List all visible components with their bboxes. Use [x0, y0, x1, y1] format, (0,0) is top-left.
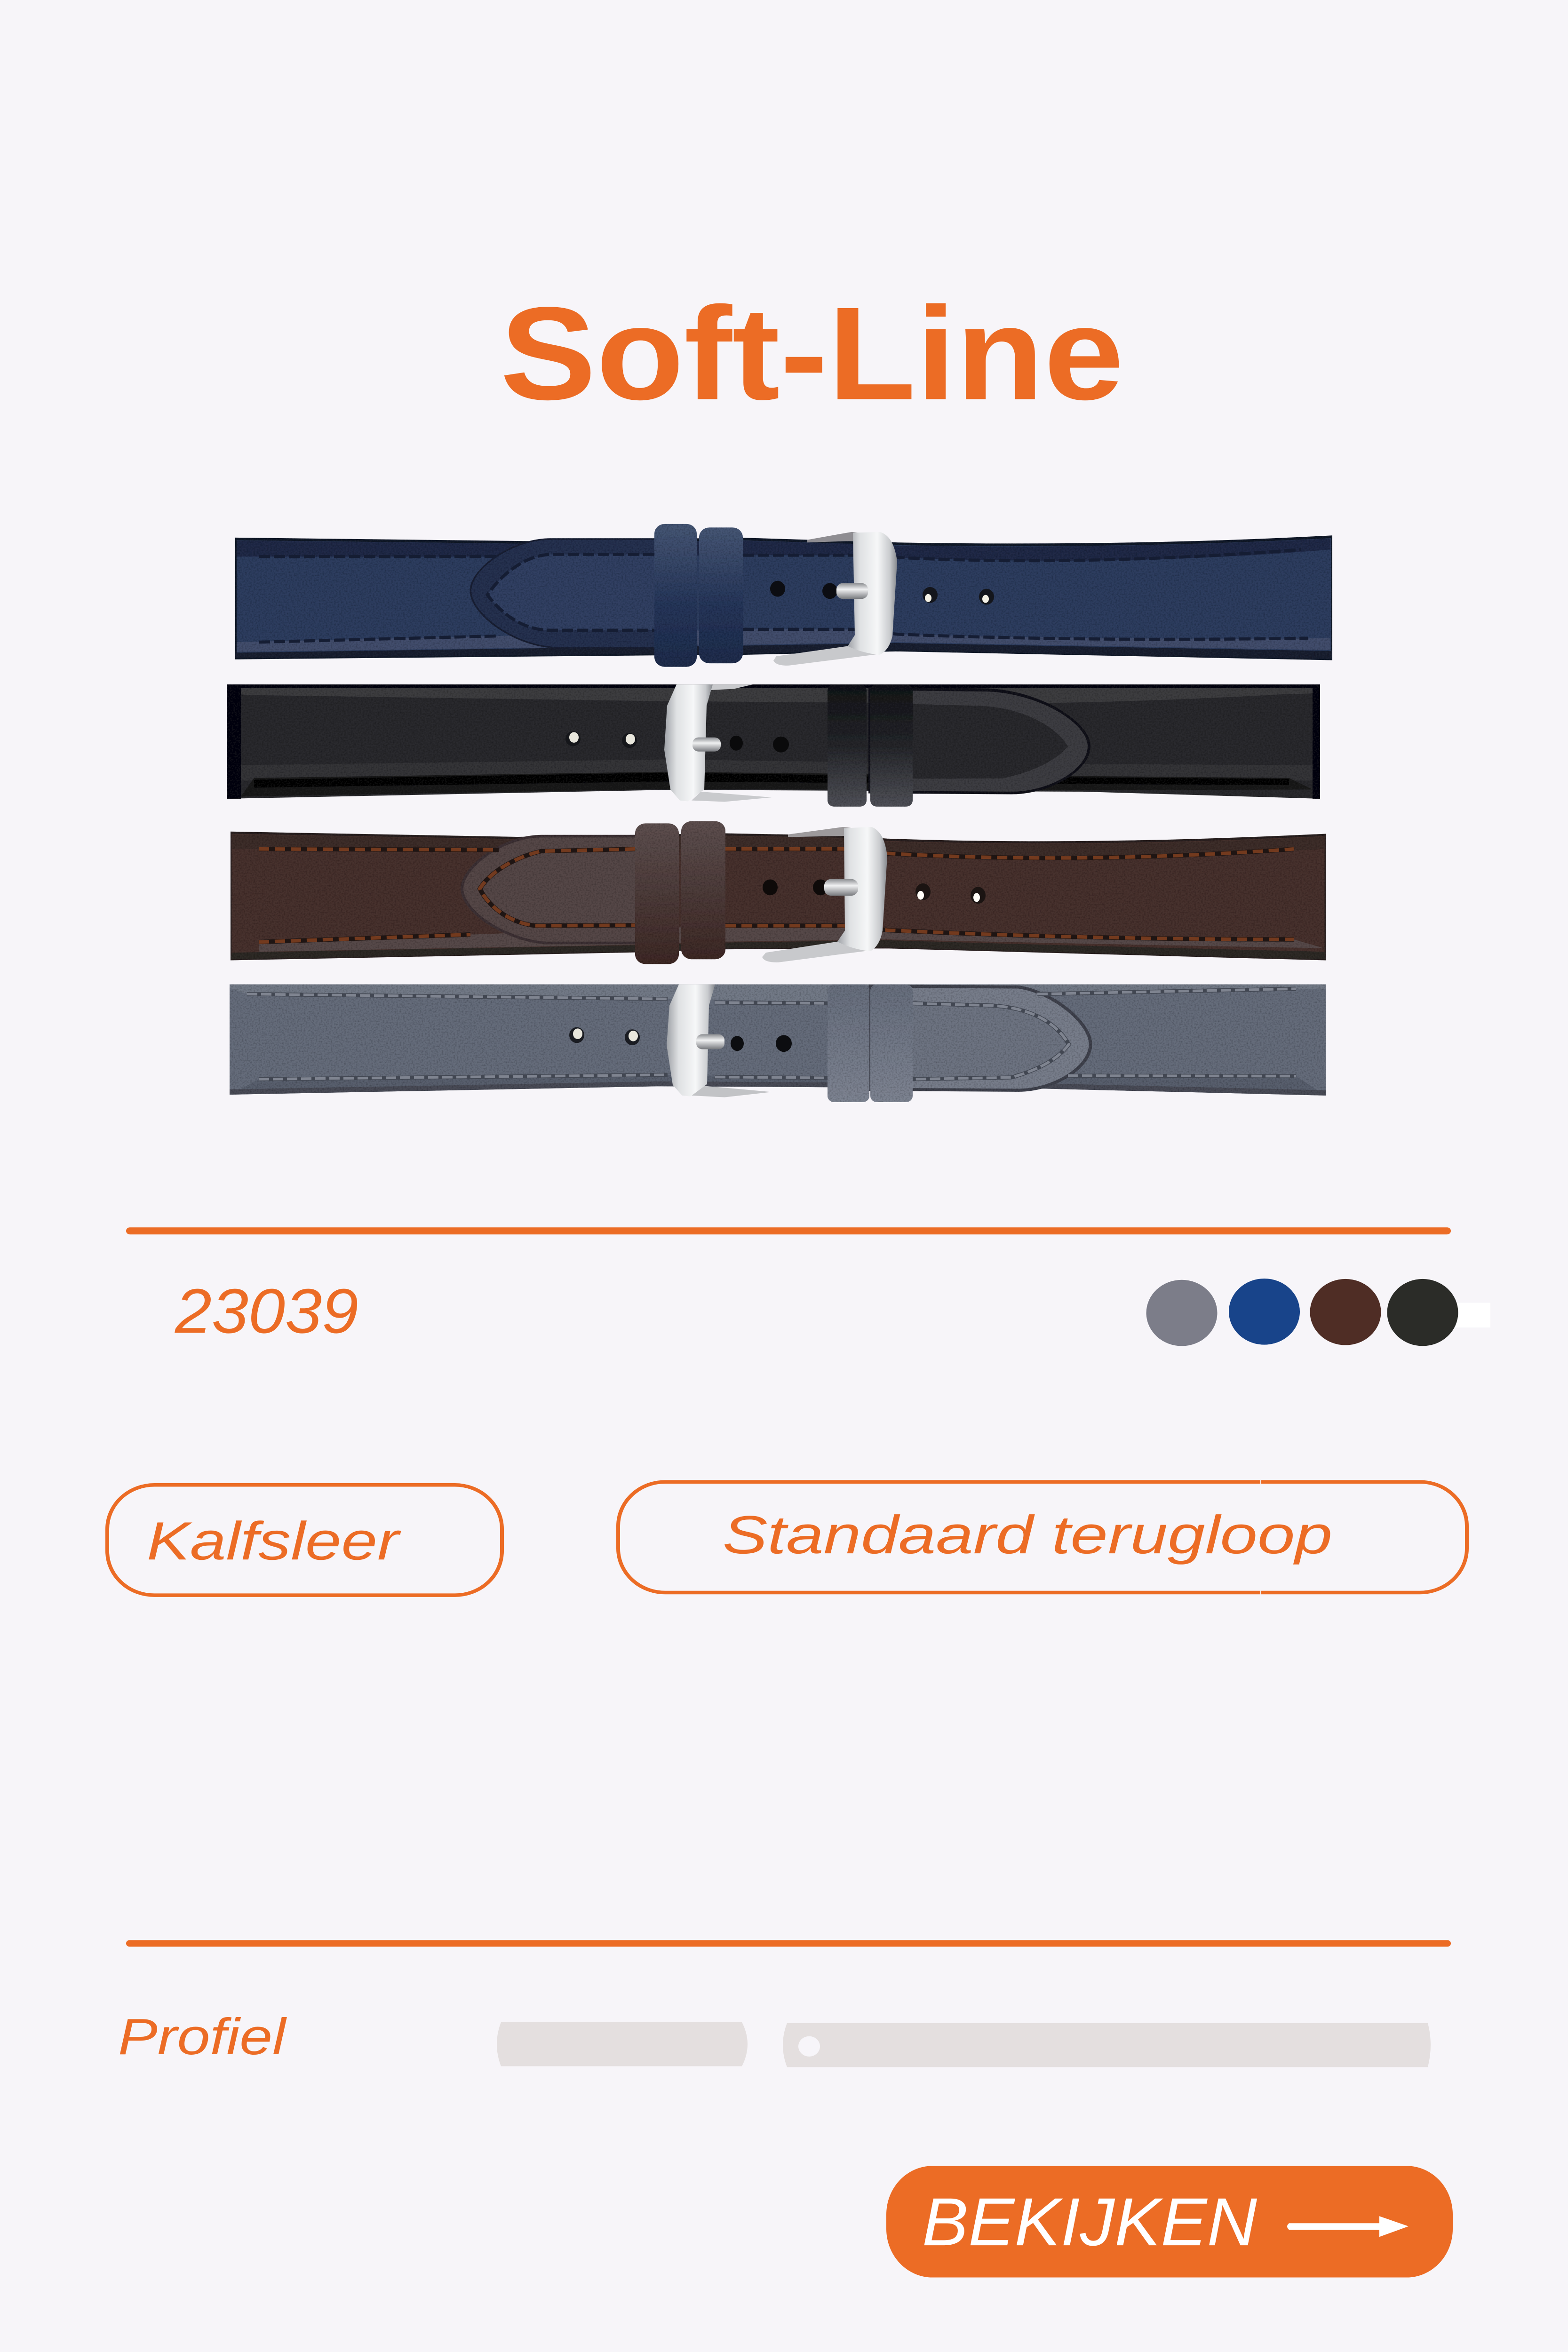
swatch: blue [1229, 1279, 1300, 1345]
divider: bottom [126, 1940, 1451, 1947]
profile label: Profiel [118, 2008, 287, 2065]
swatch: brown [1310, 1279, 1381, 1345]
strap holes [770, 581, 994, 604]
swatch: black [1387, 1279, 1458, 1346]
tag: material [107, 1485, 502, 1595]
tag: strap shape [618, 1480, 1467, 1595]
buckle [773, 532, 897, 666]
strap holes [763, 879, 986, 904]
strap: grey [230, 985, 1326, 1102]
article number: 23039 [175, 1276, 358, 1346]
title: Soft-Line [500, 279, 1124, 427]
strap holes [569, 1027, 792, 1052]
strap: dark brown [231, 821, 1326, 964]
button [886, 2166, 1453, 2278]
strap holes [565, 731, 789, 752]
colour swatches [1146, 1279, 1490, 1346]
buckle [667, 985, 772, 1097]
icon: arrow [1287, 2216, 1409, 2237]
tag: strap shape: Standaard terugloop [723, 1505, 1332, 1565]
profile bar: short [497, 2022, 748, 2066]
button: BEKIJKEN [922, 2184, 1257, 2260]
buckle [664, 684, 772, 802]
strap: black [227, 684, 1320, 807]
product image: four watch straps [227, 524, 1332, 1102]
strap: navy blue [235, 524, 1332, 667]
swatch: grey [1146, 1280, 1218, 1346]
profile bar: long with dot [783, 2023, 1431, 2067]
tag: material: Kalfsleer [147, 1511, 401, 1571]
buckle [762, 827, 887, 962]
divider: top [126, 1227, 1451, 1234]
